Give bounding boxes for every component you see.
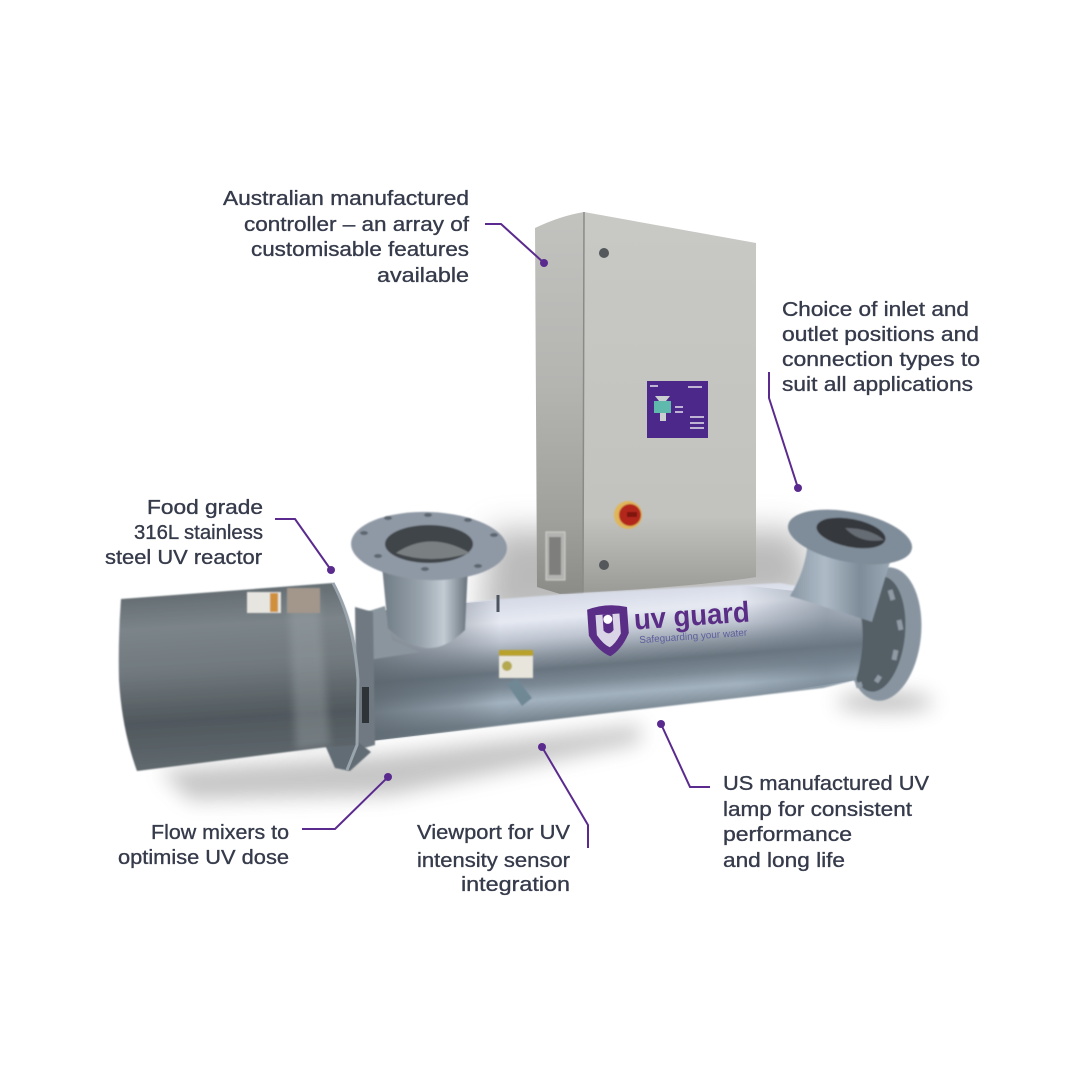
logo wordmark: uv guard [633,596,751,636]
right end flange [840,563,928,705]
callout text: 316L stainless [134,522,263,544]
callout text [118,822,289,869]
cabinet side panel [535,212,584,594]
callout text [223,188,469,287]
callout text [417,822,571,896]
callout text: controller – an array of [244,214,469,236]
callout text: intensity sensor [417,850,570,872]
callout: UV lamp [657,720,930,872]
leader line [302,773,392,829]
locking ring [333,583,358,770]
cap highlight [288,590,330,750]
controller cabinet [535,212,756,594]
callout text [723,773,930,872]
callout: viewport [417,743,588,896]
callout text: and long life [723,850,845,872]
cabinet door [583,212,756,593]
shadows behind the unit [160,530,933,800]
callout: stainless steel reactor [105,497,335,574]
leader line [769,372,802,492]
callout text: Flow mixers to [151,822,289,844]
right inlet neck [790,540,890,622]
callout: flow mixers [118,773,392,869]
callout: controller [223,188,548,287]
callout text: steel UV reactor [105,547,262,569]
saddle at left neck base [366,606,420,660]
callout text: performance [723,824,852,846]
callout text: Viewport for UV [417,822,571,844]
door screws [599,248,609,570]
logo shield [587,604,630,658]
callout text: optimise UV dose [118,847,289,869]
warning sticker with viewport fitting [499,650,533,706]
callout text: suit all applications [782,374,973,396]
left flange [350,509,508,583]
warning labels on cap [247,588,320,613]
UV reactor [119,500,928,771]
isolator switch [614,501,642,529]
main reactor tube [366,583,863,741]
logo tagline: Safeguarding your water [639,628,748,646]
right flange [783,500,917,574]
callout text: Australian manufactured [223,188,469,210]
callout text [782,299,980,396]
leader line [485,224,548,267]
lower flange segment [325,742,371,771]
callout text [105,497,263,569]
callout text: customisable features [251,239,469,261]
UV Guard logo [587,595,752,658]
callout: inlet and outlet [769,299,980,492]
callout text: outlet positions and [782,324,979,346]
callout text: Choice of inlet and [782,299,969,321]
callout text: integration [461,874,570,896]
callout text: Food grade [147,497,263,519]
touch screen display [647,381,708,438]
lamp housing cap [119,583,375,771]
flange collar [355,607,375,750]
small stud on tube [496,595,500,612]
callout text: connection types to [782,349,980,371]
leader line [275,519,335,574]
leader line [538,743,588,848]
callout text: US manufactured UV [723,773,930,795]
cap body [119,583,358,771]
ventilation grille [546,532,565,580]
left outlet neck [382,565,468,648]
callout text: available [377,265,469,287]
leader line [657,720,710,787]
callout text: lamp for consistent [723,799,912,821]
